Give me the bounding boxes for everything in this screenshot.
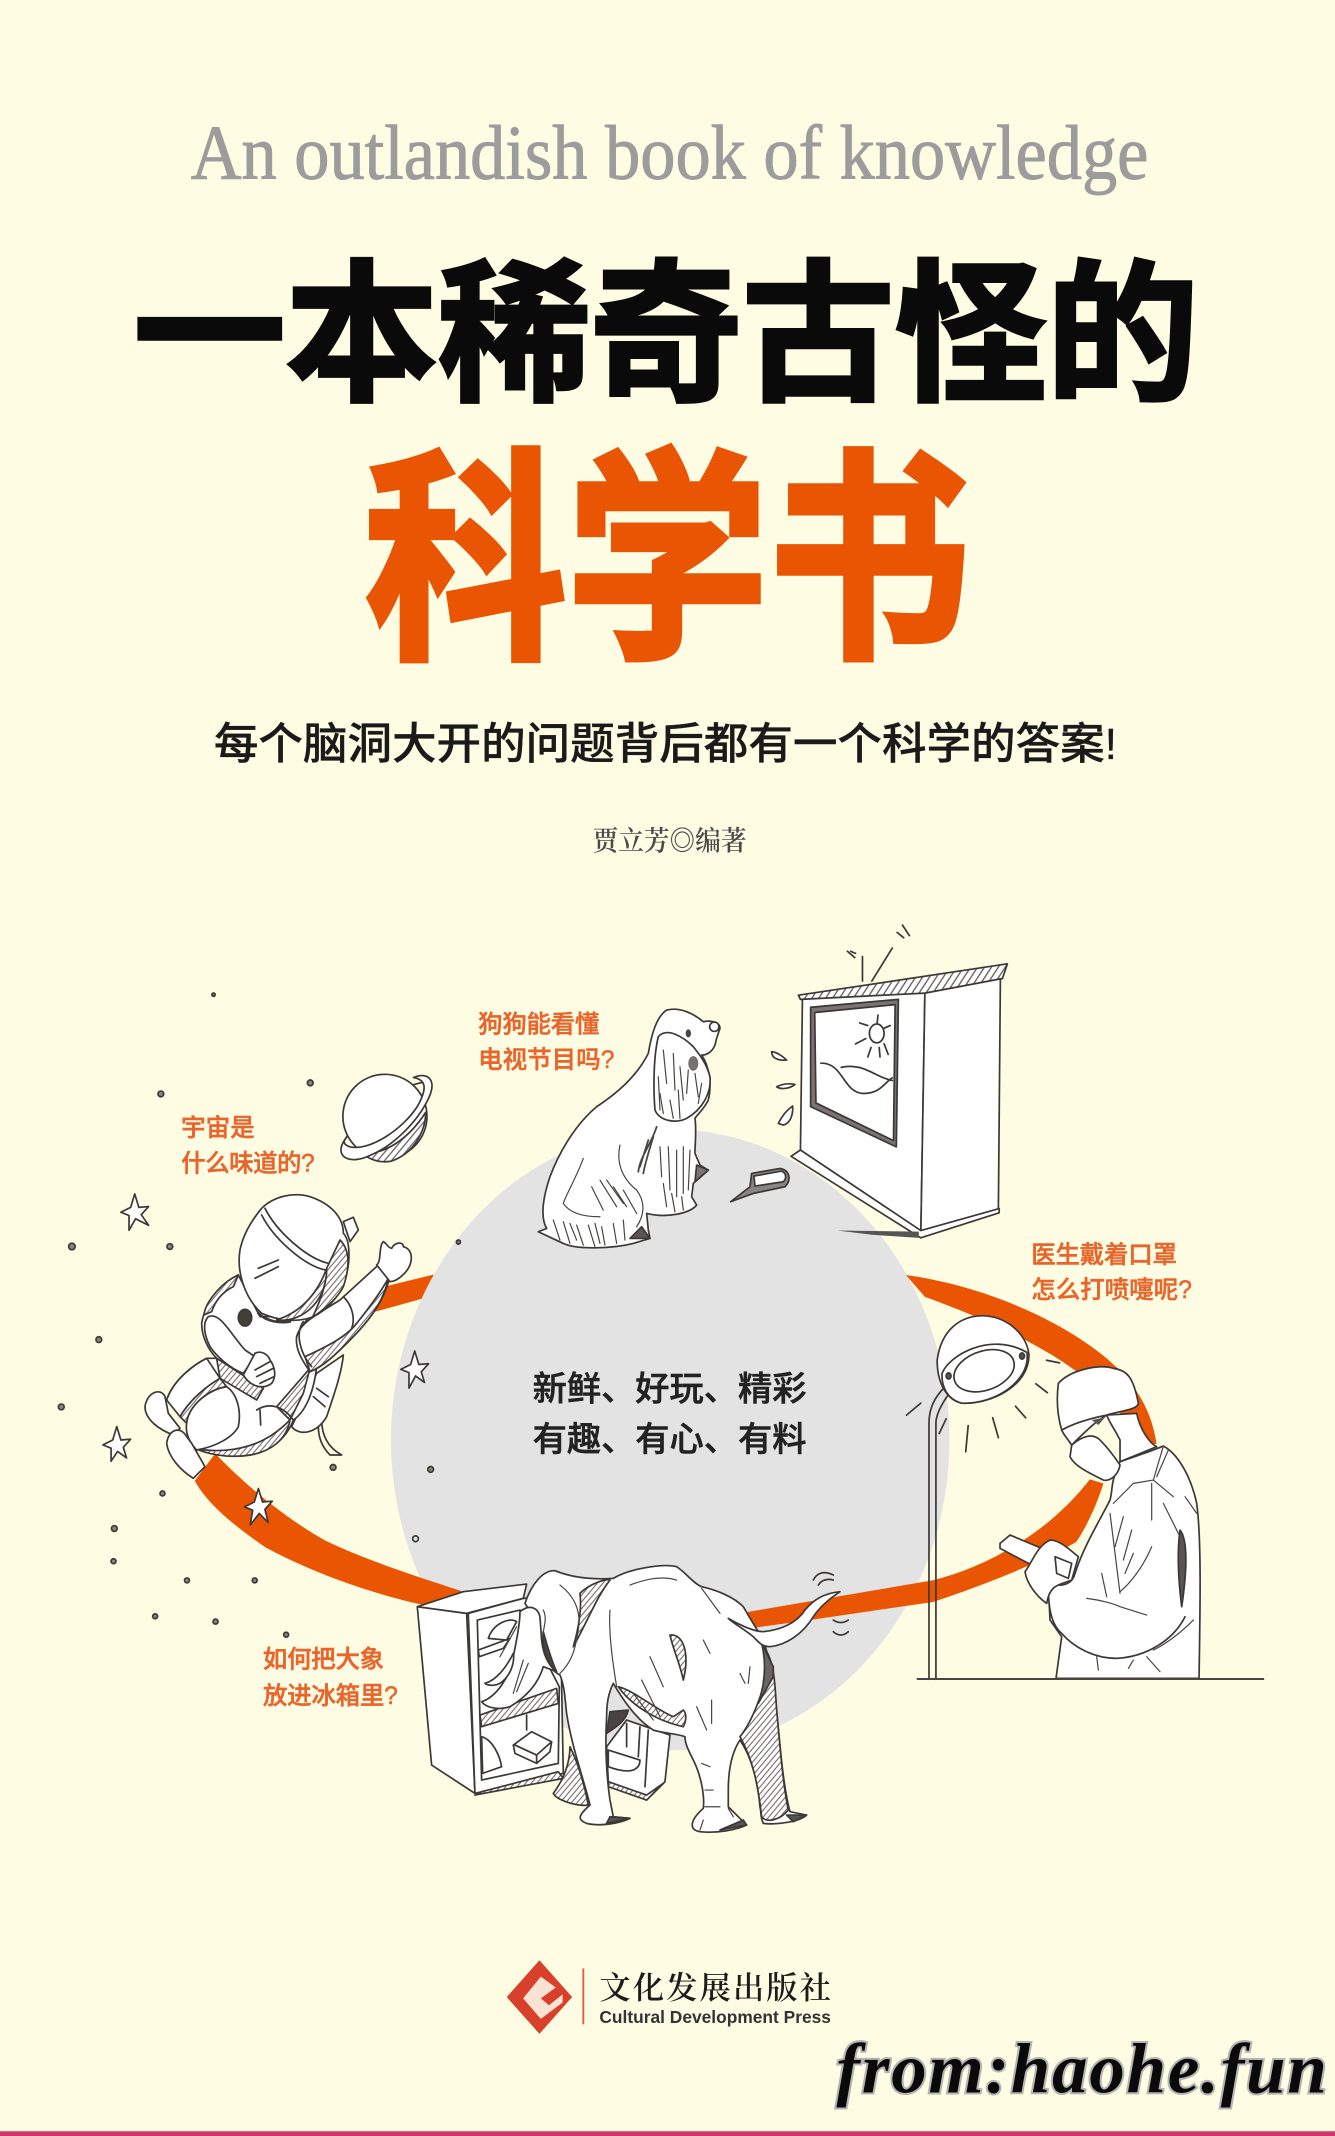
english title: An outlandish book of knowledge: [191, 109, 1148, 195]
planet: [333, 1073, 438, 1164]
question: dog: 电视节目吗?: [478, 1046, 614, 1074]
backpack and tether: [292, 1355, 343, 1455]
fridge: [417, 1584, 670, 1800]
watermark: from:haohe.fun: [836, 2030, 1327, 2108]
question: universe: 什么味道的?: [181, 1150, 315, 1178]
question: dog: [478, 1011, 614, 1074]
phone and hand: [1000, 1535, 1042, 1565]
logo divider: [582, 1968, 584, 2024]
question: doctor: 怎么打喷嚏呢?: [1031, 1276, 1192, 1304]
tail: [728, 1592, 840, 1647]
orange ring: visible bands: [195, 1275, 1157, 1628]
center text: [533, 1370, 806, 1459]
legs and boots: [167, 1358, 220, 1417]
main title: 一本稀奇古怪的: [134, 211, 1199, 432]
raised arm and hand: [296, 1265, 390, 1372]
gown: [1048, 1446, 1200, 1678]
doctor: [1000, 1367, 1200, 1678]
publisher english name: Cultural Development Press: [599, 2007, 831, 2027]
sleeve: [1048, 1573, 1185, 1658]
orange ring: upper left fragment: [375, 1272, 450, 1312]
stars and dots: [58, 993, 460, 1637]
tv noise marks: [772, 1052, 795, 1125]
elephant: [482, 1566, 848, 1832]
question: elephant: [263, 1645, 398, 1710]
publisher chinese name: 文化发展出版社: [599, 1962, 831, 2007]
fridge and elephant: [417, 1566, 848, 1832]
astronaut: [145, 1195, 411, 1478]
subtitle: 每个脑洞大开的问题背后都有一个科学的答案!: [214, 721, 1117, 769]
question: dog: 狗狗能看懂: [478, 1011, 599, 1039]
head and hood: [1107, 1413, 1157, 1462]
ground line: [917, 1678, 1264, 1680]
planet, stars and dots: [58, 993, 460, 1637]
question: elephant: 放进冰箱里?: [263, 1682, 398, 1710]
television: [791, 925, 1007, 1238]
torso and hips: [167, 1275, 317, 1456]
center text: 有趣、有心、有料: [533, 1421, 806, 1459]
center text: 新鲜、好玩、精彩: [533, 1370, 806, 1408]
question: doctor: [1031, 1241, 1192, 1304]
question: universe: [181, 1114, 315, 1178]
dog fur: [553, 1050, 702, 1247]
question: doctor: 医生戴着口罩: [1031, 1241, 1177, 1269]
helmet: [239, 1195, 349, 1320]
left arm and hand: [205, 1316, 255, 1373]
dog: [538, 1009, 795, 1248]
dog ear: [654, 1033, 710, 1121]
question: universe: 宇宙是: [181, 1114, 255, 1142]
bottom stripe: [0, 2131, 1335, 2136]
orange title: 科学书: [365, 379, 970, 706]
grey circle: [391, 1129, 949, 1750]
publisher logo: [507, 1960, 572, 2034]
floor lamp: [907, 1316, 1060, 1679]
question: elephant: 如何把大象: [263, 1645, 384, 1673]
author: 贾立芳◎编著: [593, 819, 747, 858]
dog body: [538, 1009, 720, 1248]
remote control: [731, 1168, 789, 1202]
